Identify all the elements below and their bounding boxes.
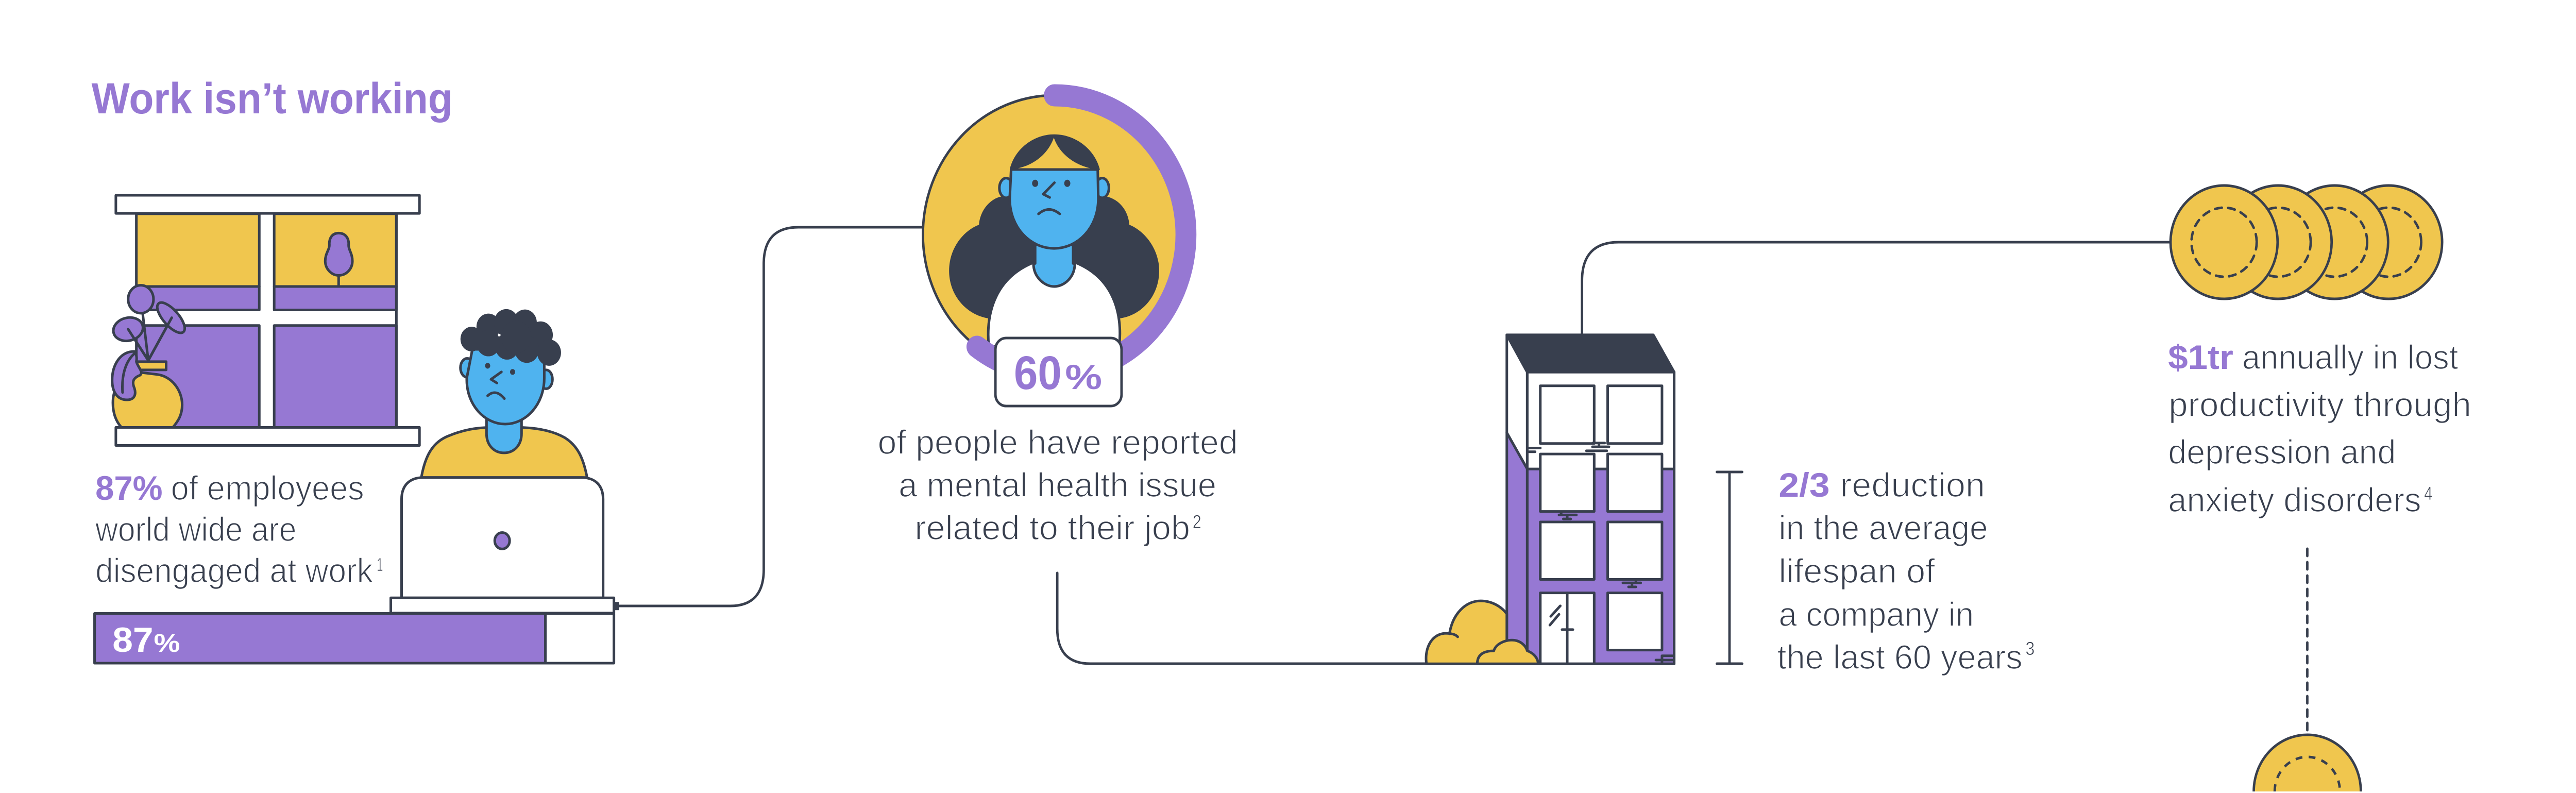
icon: woman in donut chart [923,95,1186,374]
progress bar: 87%: 87 [112,620,154,660]
icon: sad man at laptop [391,309,619,613]
text: 2/3 reduction [1777,466,2035,676]
text: 2/3 reduction: the last 60 years [1777,638,2023,676]
text: mental health issue: related to their job [914,509,1190,547]
arrow: dashed line to next coin [2306,549,2309,738]
text: 2/3 reduction: a company in [1778,595,1974,633]
title: Work isn’t working [92,75,453,123]
text: mental health issue: 2 [1193,512,1201,532]
text: $1tr annually: depression and [2168,433,2396,471]
panel: lost productivity [2168,185,2471,791]
progress bar: 87% [95,614,614,663]
text: 2/3 reduction: reduction [1840,466,1985,504]
callout: 60%: 60 [1014,346,1062,399]
text: 87% of employees: of employees [171,469,364,507]
arrow: connector building to coins [1582,242,2171,335]
text: 87% of employees [95,469,383,589]
bracket: height marker [1717,472,1742,664]
icon: bushes [1426,601,1538,664]
panel: company lifespan [1426,335,2035,676]
text: 2/3 reduction: 2/3 [1778,466,1830,504]
text: 2/3 reduction: in the average [1778,509,1988,547]
progress bar: 87%: % [154,629,180,657]
text: 87% of employees: 87% [95,469,163,507]
icon: building [1507,335,1674,664]
callout: 60% [995,338,1122,406]
callout: 60%: % [1065,358,1102,397]
icon: plant pot [112,285,189,427]
text: 87% of employees: disengaged at work [95,551,374,589]
icon: window [116,195,419,446]
icon: coin [2254,735,2361,791]
panel: mental health [878,95,1238,547]
arrow: connector laptop to woman [619,227,923,606]
text: $1tr annually: anxiety disorders [2168,481,2421,519]
text: $1tr annually: 4 [2424,483,2432,504]
text: $1tr annually [2168,338,2471,519]
text: $1tr annually: $1tr [2168,338,2233,376]
arrow: connector woman to building [1057,573,1429,664]
panel: disengaged employees [95,195,619,663]
text: mental health issue [878,423,1238,547]
text: mental health issue: of people have reported [878,423,1238,461]
text: mental health issue: a mental health issue [899,466,1216,504]
icon: coin stack [2171,185,2442,299]
text: 87% of employees: 1 [377,554,383,575]
text: 2/3 reduction: 3 [2025,638,2035,659]
text: $1tr annually: productivity through [2168,385,2471,424]
text: $1tr annually: annually in lost [2242,338,2459,376]
text: 87% of employees: world wide are [95,510,296,548]
text: 2/3 reduction: lifespan of [1778,552,1935,590]
